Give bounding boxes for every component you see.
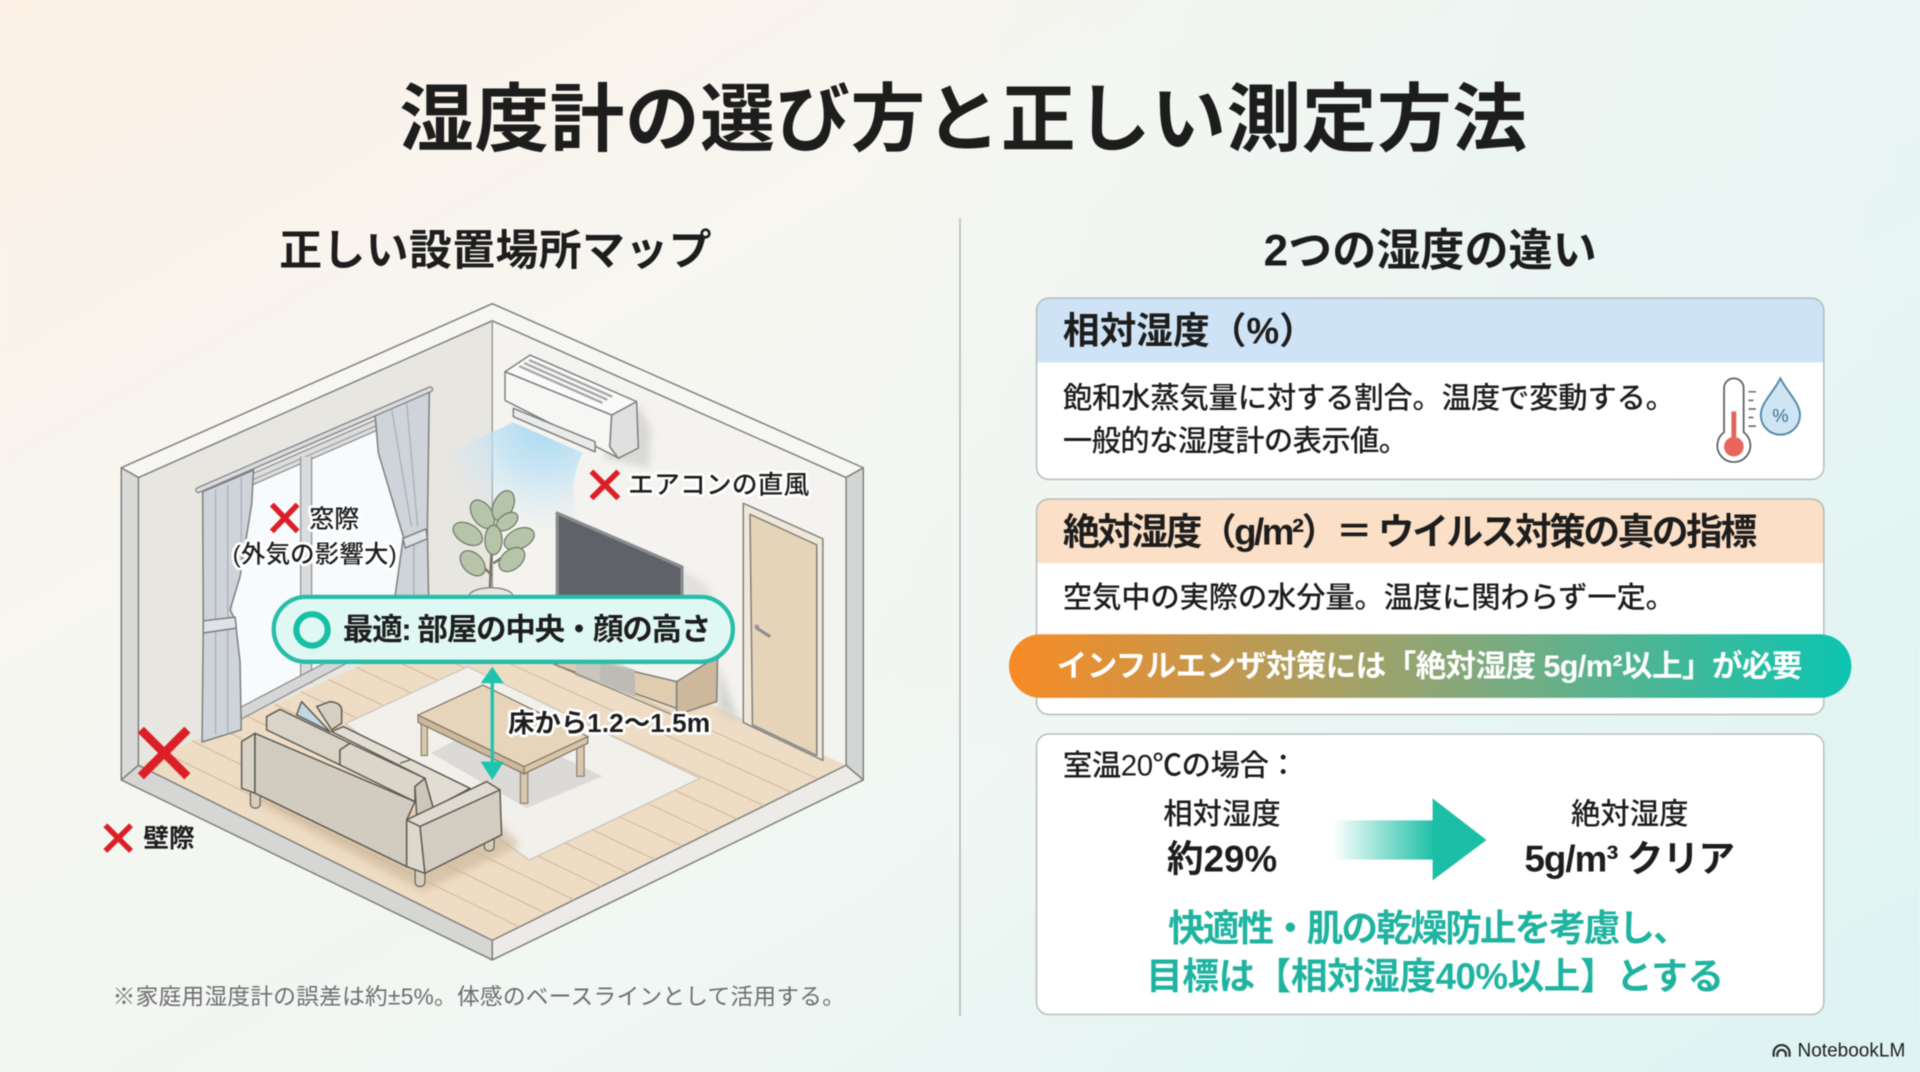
heading: placement map: 正しい設置場所マップ xyxy=(279,227,712,275)
label: height from floor: 床から1.2〜1.5m xyxy=(508,708,710,738)
card body xyxy=(1063,382,1675,458)
icon: thermometer and water drop xyxy=(1717,378,1800,462)
absolute humidity value: 絶対湿度 xyxy=(1571,798,1689,831)
conclusion: 快適性・肌の乾燥防止を考慮し、 xyxy=(1168,908,1690,949)
air conditioner xyxy=(441,355,651,539)
tv stand xyxy=(539,649,740,722)
card heading: 相対湿度（%） xyxy=(1063,311,1316,352)
coffee table xyxy=(418,685,588,803)
card heading: 絶対湿度（g/m²）＝ ウイルス対策の真の指標 xyxy=(1063,511,1757,552)
label: near window xyxy=(233,504,397,569)
label: near window: (外気の影響大) xyxy=(233,541,397,569)
panel: relative humidity xyxy=(1037,298,1824,479)
conclusion xyxy=(1146,908,1724,997)
card body: 飽和水蒸気量に対する割合。温度で変動する。 xyxy=(1063,382,1675,415)
conclusion: 目標は【相対湿度40%以上】とする xyxy=(1146,956,1724,997)
room shell xyxy=(121,304,863,960)
callout: best location xyxy=(274,597,733,662)
rug and table shadow xyxy=(345,667,700,860)
banner: influenza threshold: インフルエンザ対策には「絶対湿度 5g/m²以上」が必要 xyxy=(1057,649,1802,684)
card body: 一般的な湿度計の表示値。 xyxy=(1063,425,1408,458)
panel: isometric room map xyxy=(105,304,863,960)
condition text: 室温20℃の場合： xyxy=(1063,749,1298,782)
television xyxy=(557,513,716,661)
panel: absolute humidity xyxy=(1037,499,1824,714)
label: near window: 窓際 xyxy=(309,506,359,534)
title: 湿度計の選び方と正しい測定方法 xyxy=(399,77,1527,161)
footnote: ※家庭用湿度計の誤差は約±5%。体感のベースラインとして活用する。 xyxy=(113,984,845,1010)
notebooklm mark: NotebookLM xyxy=(1798,1041,1905,1062)
house plant xyxy=(449,487,538,605)
absolute humidity value xyxy=(1524,798,1735,879)
label: near wall xyxy=(105,824,195,853)
banner: influenza threshold xyxy=(1009,634,1851,698)
window xyxy=(233,413,431,724)
heading: two humidity types: 2つの湿度の違い xyxy=(1264,226,1597,275)
relative humidity value: 相対湿度 xyxy=(1163,798,1281,831)
door xyxy=(743,503,823,760)
label: near wall: 壁際 xyxy=(143,824,195,853)
icon: thermometer and water drop: % xyxy=(1772,405,1789,426)
callout: best location: 最適: 部屋の中央・顔の高さ xyxy=(343,613,711,647)
card body: 空気中の実際の水分量。温度に関わらず一定。 xyxy=(1063,582,1675,615)
absolute humidity value: 5g/m³ クリア xyxy=(1524,838,1735,879)
relative humidity value xyxy=(1163,798,1281,879)
curtains xyxy=(198,389,430,742)
height arrow xyxy=(481,667,504,780)
relative humidity value: 約29% xyxy=(1167,838,1277,879)
sofa xyxy=(242,702,520,891)
label: air conditioner draft: エアコンの直風 xyxy=(628,470,810,499)
arrow xyxy=(1332,798,1487,880)
big red x: wall corner xyxy=(141,730,187,776)
panel: conversion example xyxy=(1037,734,1824,1014)
